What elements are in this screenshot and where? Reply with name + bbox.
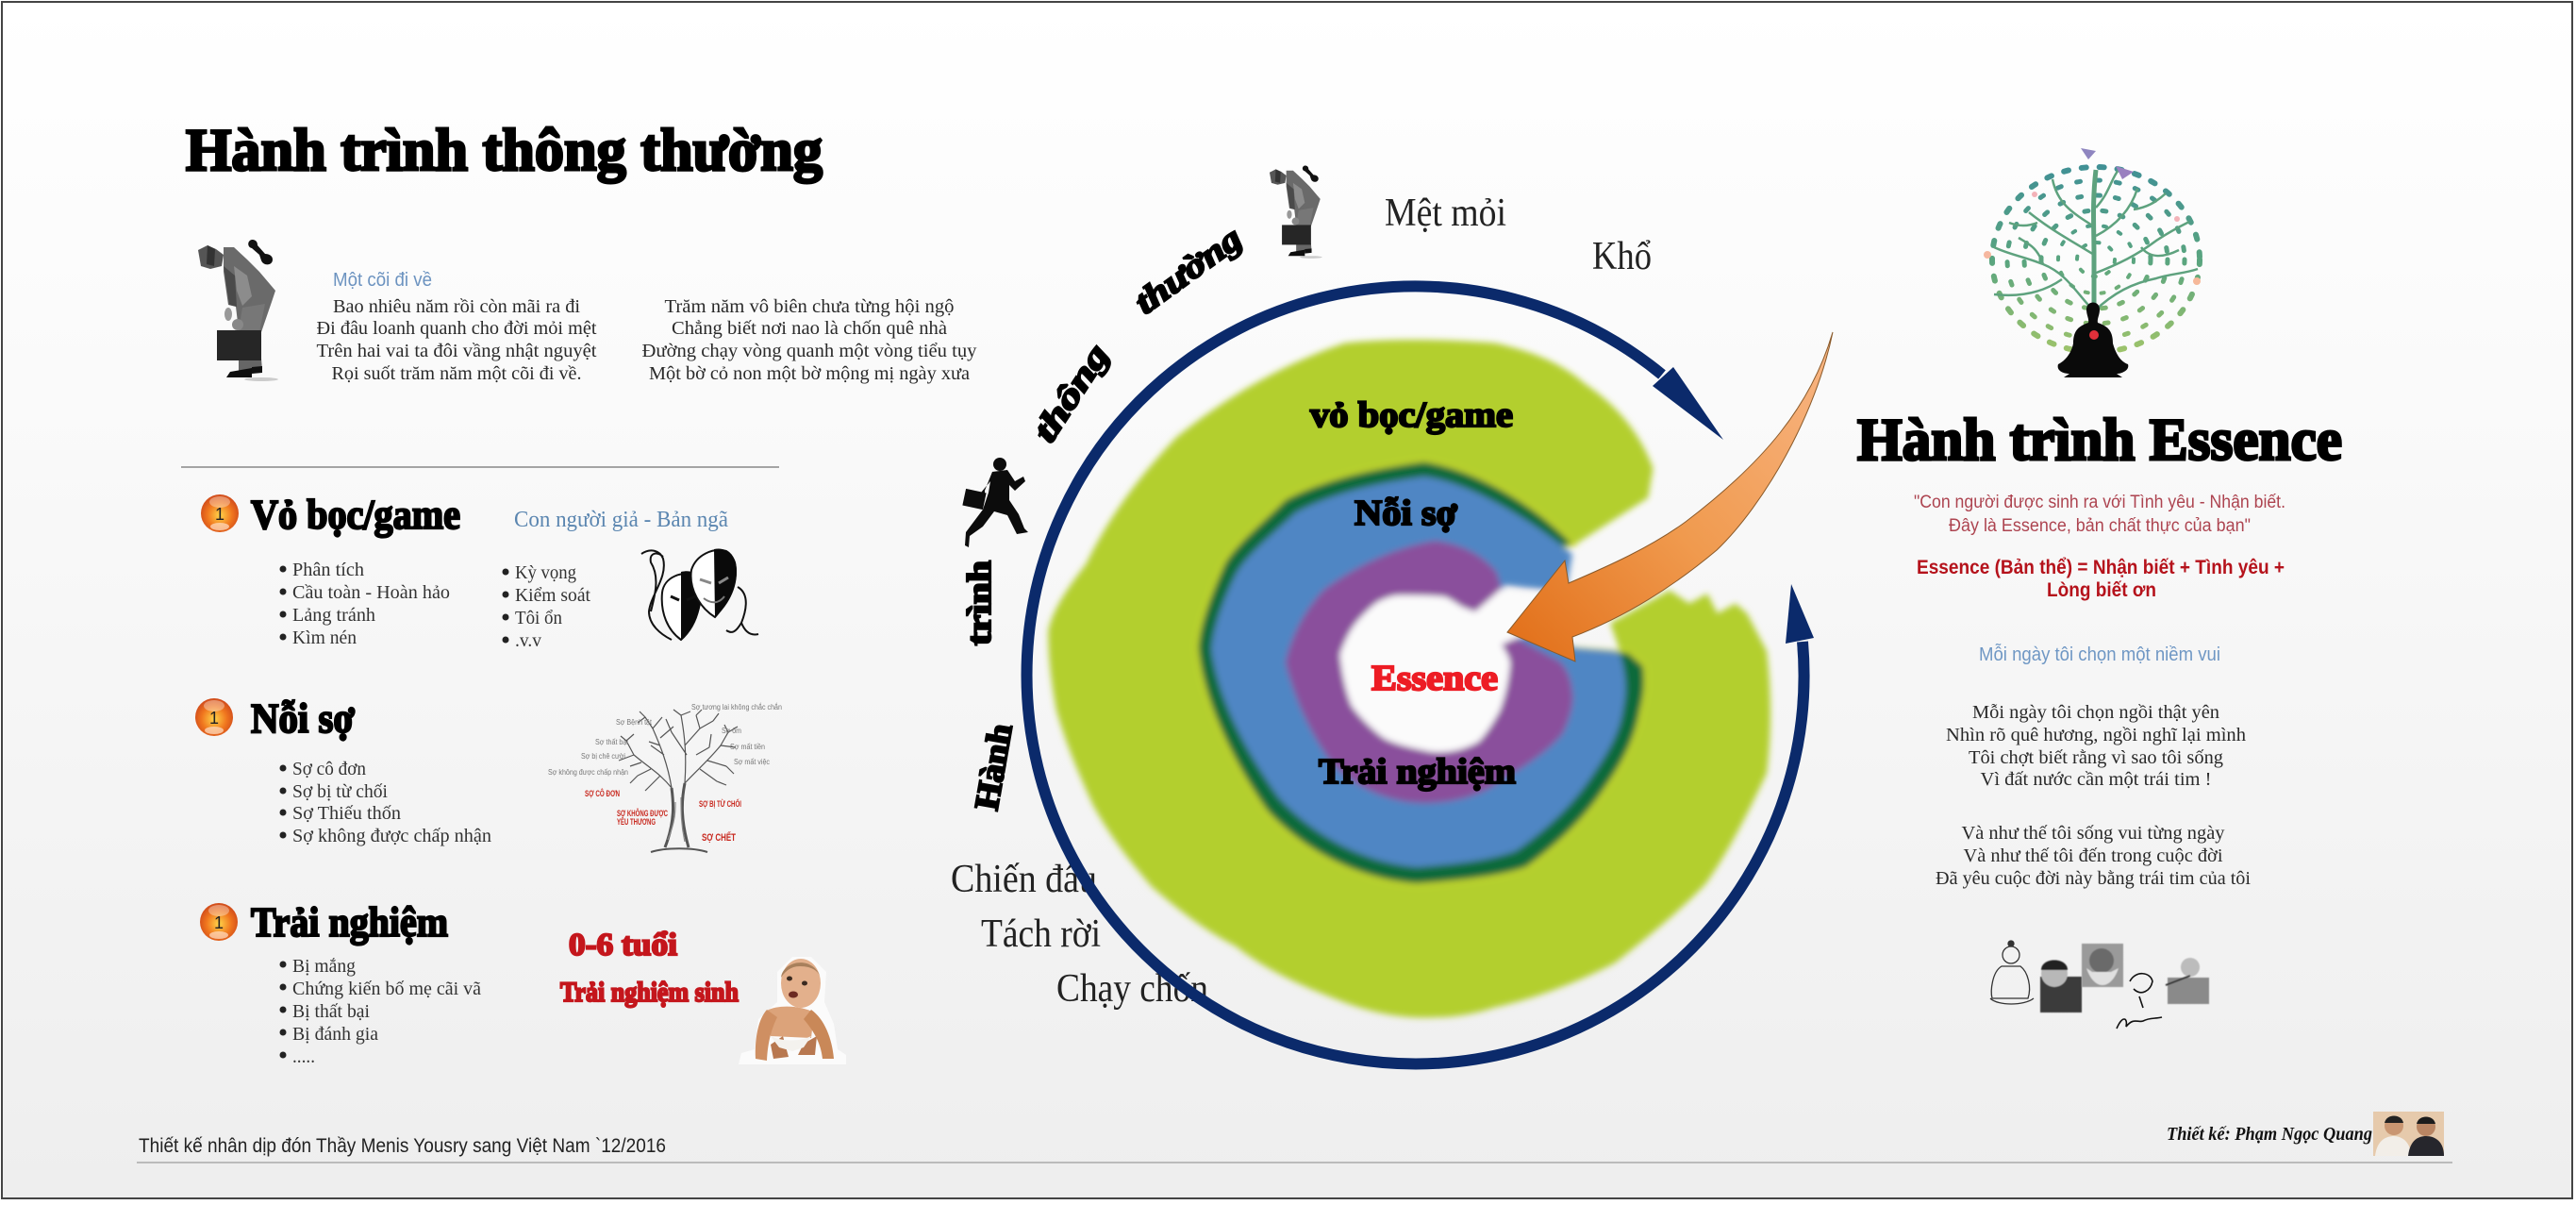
icon: running businessman [962, 458, 1028, 547]
poem stanza one: Tôi chợt biết rằng vì sao tôi sống [1969, 747, 2223, 768]
word: Hành: Hành [967, 721, 1020, 812]
tree drawing [619, 710, 738, 852]
word: thường: thường [1127, 219, 1249, 321]
icon: number ball 1: 1 [215, 505, 224, 524]
poem heading: Một cõi đi về [333, 270, 432, 291]
arrow: orange curved arrow into the centre [1507, 332, 1833, 661]
arrowhead: right [1786, 584, 1814, 644]
footer note: Thiết kế nhân dịp đón Thầy Menis Yousry sang Việt Nam `12/2016 [139, 1135, 666, 1157]
word: Tách rời: Tách rời [981, 912, 1101, 956]
list [279, 956, 481, 1067]
icon: number ball 1: 1 [214, 913, 224, 932]
poem stanza one: Mỗi ngày tôi chọn ngồi thật yên [1972, 702, 2219, 723]
red fear labels: SỢ KHÔNG ĐƯỢC [617, 808, 668, 818]
gray fear labels [548, 703, 782, 777]
right title: Hành trình Essence: Hành trình Essence [1857, 406, 2342, 473]
word: Mệt mỏi: Mệt mỏi [1385, 192, 1506, 235]
ring arc [1027, 286, 1804, 1063]
birds and butterflies [1984, 148, 2201, 285]
list [279, 759, 491, 846]
list: Sợ cô đơn [292, 759, 366, 779]
red fear labels: YÊU THƯƠNG [617, 816, 656, 827]
gray fear labels: Sợ thất bại [595, 738, 628, 746]
list: Bị mắng [292, 956, 356, 977]
red fear labels: SỢ CÔ ĐƠN [585, 788, 620, 798]
layer: white centre and opening [1340, 589, 1582, 752]
heading: Vỏ bọc/game [251, 492, 460, 538]
word: thông: thông [1025, 337, 1116, 448]
poem stanza one [1946, 702, 2246, 790]
quote: Đây là Essence, bản chất thực của bạn" [1949, 516, 2251, 536]
panel: Vỏ bọc/game [201, 492, 758, 651]
icon: theatre masks [641, 549, 758, 640]
age label: 0-6 tuổi [569, 928, 677, 962]
illustration: meditating figure under tree [1984, 148, 2201, 377]
formula: Essence definition: Lòng biết ơn [2047, 579, 2156, 601]
list: Chứng kiến bố mẹ cãi vã [292, 979, 481, 999]
word: trình: trình [960, 561, 998, 645]
portrait: man [2040, 961, 2082, 1013]
list column 1 [279, 560, 450, 648]
designer credit: Thiết kế: Phạm Ngọc Quang [2167, 1124, 2372, 1145]
poem right stanza: Một bờ cỏ non một bờ mộng mị ngày xưa [649, 363, 970, 384]
poem stanza one: Nhìn rõ quê hương, ngồi nghĩ lại mình [1946, 725, 2246, 745]
poem left stanza: Trên hai vai ta đôi vầng nhật nguyệt [317, 341, 597, 361]
diagram: painted spiral layers [1048, 340, 1770, 1017]
gray fear labels: Sợ bị chê cười [581, 752, 625, 761]
panel: Nỗi sợ [195, 695, 782, 852]
gray fear labels: Sợ tương lai không chắc chắn [691, 703, 782, 711]
icon: number ball 1 [195, 698, 233, 736]
list: ..... [292, 1046, 315, 1067]
poem stanza one: Vì đất nước cần một trái tim ! [1981, 769, 2211, 790]
red heart [2089, 330, 2099, 340]
gray fear labels: Sợ Bệnh tật [616, 718, 653, 727]
list column 1: Lảng tránh [292, 605, 375, 626]
list column 2: .v.v [515, 630, 541, 651]
arrowhead: top [1653, 367, 1723, 440]
list: Bị thất bại [292, 1001, 370, 1022]
poem left stanza: Rọi suốt trăm năm một cõi đi về. [332, 363, 581, 384]
label: Trải nghiệm: Trải nghiệm [1319, 752, 1516, 792]
list column 2 [502, 562, 590, 651]
list: Sợ bị từ chối [292, 781, 388, 802]
poem heading: Mỗi ngày tôi chọn một niềm vui: Mỗi ngày tôi chọn một niềm vui [1979, 644, 2220, 665]
birth experience label: Trải nghiệm sinh [560, 977, 739, 1008]
icon: number ball 1 [201, 494, 239, 532]
formula: Essence definition [1917, 557, 2285, 601]
illustration: crawling baby [739, 957, 846, 1064]
red fear labels: SỢ BỊ TỪ CHỐI [699, 798, 741, 809]
word: Khổ: Khổ [1592, 235, 1652, 278]
photo: two designers [2373, 1112, 2444, 1156]
poem left stanza [317, 296, 597, 384]
gray fear labels: Sợ mất việc [734, 758, 770, 766]
poem stanza two: Và như thế tôi sống vui từng ngày [1962, 823, 2224, 844]
formula: Essence definition: Essence (Bản thể) = Nhận biết + Tình yêu + [1917, 557, 2285, 578]
panel: Trải nghiệm [200, 899, 846, 1067]
label: vỏ bọc/game: vỏ bọc/game [1310, 395, 1513, 435]
poem right stanza: Đường chạy vòng quanh một vòng tiểu tụy [641, 341, 977, 361]
Buddha sketch [1990, 941, 2034, 1004]
poem left stanza: Bao nhiêu năm rồi còn mãi ra đi [333, 296, 580, 317]
poem right stanza: Trăm năm vô biên chưa từng hội ngộ [664, 296, 955, 317]
list: Sợ Thiếu thốn [292, 803, 401, 824]
poem stanza two: Đã yêu cuộc đời này bằng trái tim của tôi [1936, 868, 2251, 889]
layer: blue band [1211, 477, 1625, 867]
gray fear labels: Sợ ốm [722, 727, 741, 735]
poem stanza two: Và như thế tôi đến trong cuộc đời [1964, 845, 2223, 866]
subheading: Con người giả - Bản ngã [514, 508, 728, 532]
poem: Một cõi đi về [317, 270, 977, 384]
icon: tired man small [1270, 165, 1322, 259]
list: Bị đánh gia [292, 1024, 378, 1045]
list column 1: Kìm nén [292, 628, 357, 648]
poem right stanza [641, 296, 977, 384]
layer: green outer shell [1048, 340, 1770, 1017]
quote: "Con người được sinh ra với Tình yêu - Nhận biết. [1914, 493, 2285, 512]
illustration: tree of fears [548, 703, 782, 852]
heading: Nỗi sợ [251, 695, 356, 742]
list column 2: Tôi ổn [515, 608, 562, 628]
sketch and signature [2117, 974, 2162, 1029]
poem right stanza: Chẳng biết nơi nao là chốn quê nhà [672, 318, 947, 339]
list column 1: Cầu toàn - Hoàn hảo [292, 582, 450, 603]
layer: purple band [1286, 541, 1572, 803]
list column 2: Kỳ vọng [515, 562, 576, 583]
red fear labels [585, 788, 741, 844]
journey words around the circle [951, 192, 1652, 1011]
meditating silhouette [2058, 302, 2128, 377]
list column 1: Phân tích [292, 560, 364, 580]
main title: Hành trình thông thường: Hành trình thông thường [186, 116, 823, 183]
red fear labels: SỢ CHẾT [702, 831, 736, 844]
ring with two arrowheads [1027, 286, 1814, 1063]
quote [1914, 493, 2285, 536]
portrait: flute player [2166, 958, 2209, 1004]
word: Chiến đấu: Chiến đấu [951, 858, 1097, 901]
portrait: bearded sage [2082, 944, 2123, 987]
list column 2: Kiểm soát [515, 585, 590, 606]
heading: Trải nghiệm [251, 899, 448, 946]
icon: tired wind-up man with briefcase [198, 240, 278, 381]
tree branches [1994, 170, 2198, 316]
layer: dark green band [1198, 461, 1644, 884]
icon: number ball 1 [200, 903, 238, 941]
tree crown leaves [1992, 167, 2200, 352]
poem stanza two [1936, 823, 2251, 889]
label: Essence: Essence [1371, 659, 1498, 698]
portraits group [1990, 941, 2209, 1029]
word: Chạy chốn: Chạy chốn [1056, 967, 1208, 1011]
list: Sợ không được chấp nhận [292, 826, 491, 846]
label: Nỗi sợ: Nỗi sợ [1354, 494, 1457, 533]
poem left stanza: Đi đâu loanh quanh cho đời mỏi mệt [317, 318, 597, 339]
gray fear labels: Sợ mất tiền [730, 743, 765, 751]
gray fear labels: Sợ không được chấp nhận [548, 768, 628, 777]
arc caption: Hành trình thông thường [960, 219, 1249, 812]
icon: number ball 1: 1 [209, 709, 219, 728]
